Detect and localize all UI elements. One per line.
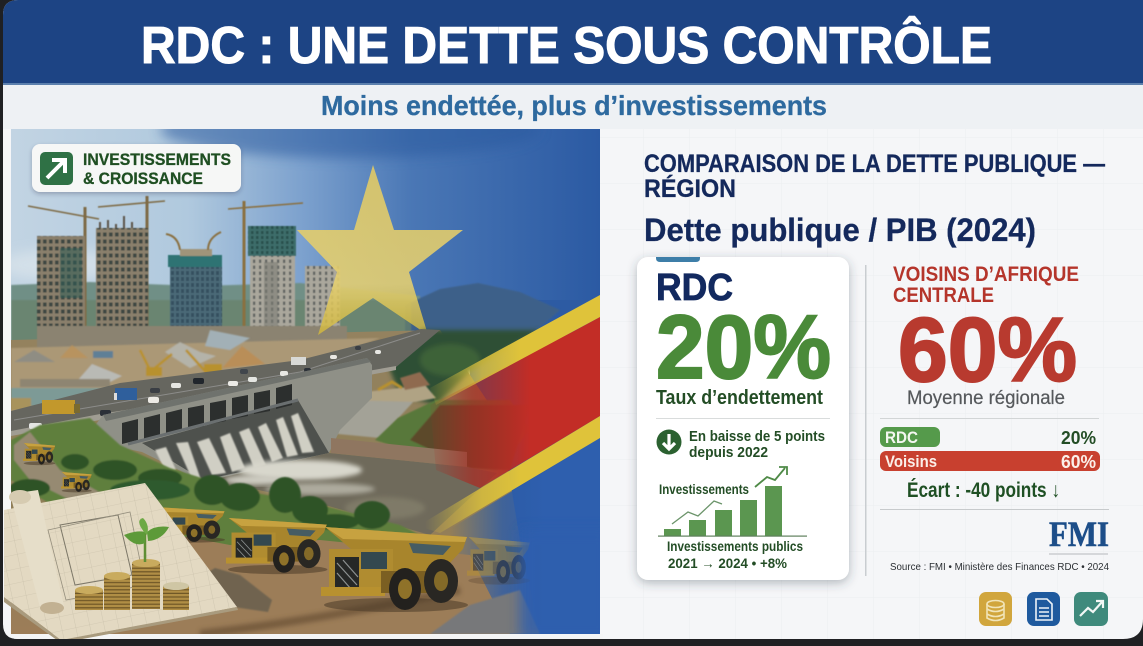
distant hills <box>11 281 560 340</box>
mining truck medium <box>226 518 327 574</box>
chart caption: 2021 → 2024 • +8% <box>668 556 787 571</box>
comparison bar: RDC: 20% <box>1061 428 1096 448</box>
icon: down arrow <box>656 430 682 454</box>
photo illustration: infrastructure and flag <box>0 102 610 640</box>
investment badge <box>32 144 241 192</box>
comparison bar: Voisins: 60% <box>1061 452 1096 472</box>
flag: lower yellow stripe <box>418 416 600 533</box>
subtitle: Moins endettée, plus d’investissements <box>321 90 827 121</box>
faded mining truck <box>467 537 530 585</box>
crane 2 <box>98 196 165 345</box>
chart subtitle: Dette publique / PIB (2024) <box>644 212 1036 248</box>
blue truck <box>114 388 137 400</box>
blueprint with coins and seedling <box>4 483 238 643</box>
water chutes <box>155 413 314 480</box>
tower 1 upper green net <box>60 248 82 298</box>
badge text: INVESTISSEMENTS <box>83 150 231 169</box>
flag: lower blue field <box>440 438 600 640</box>
work site with gravel piles <box>11 330 380 412</box>
blueprint sheet <box>4 483 238 643</box>
decline note: depuis 2022 <box>689 444 768 461</box>
mining truck large <box>321 527 468 612</box>
tower 5 <box>304 266 340 326</box>
neighbours heading: CENTRALE <box>893 284 994 307</box>
comparison bar: Voisins <box>880 451 1100 472</box>
neighbours heading: VOISINS D’AFRIQUE <box>893 263 1079 286</box>
construction towers <box>28 196 347 348</box>
rocks <box>172 545 540 634</box>
badge text <box>83 150 231 188</box>
gates <box>122 384 292 444</box>
icon: growth arrow <box>40 152 73 185</box>
gap: Écart : -40 points ↓ <box>907 479 1060 502</box>
bar chart: investments <box>658 467 807 537</box>
60 percent: 60% <box>898 300 1077 401</box>
crane 3 <box>228 201 303 345</box>
icon: document <box>1027 592 1060 626</box>
comparison bar: Voisins: Voisins <box>885 453 937 471</box>
dirt foreground <box>150 530 510 634</box>
tower 2 <box>95 227 148 326</box>
FMI logo: FMI <box>1049 514 1109 554</box>
left bank and trees <box>10 418 430 560</box>
yellow truck <box>42 400 80 414</box>
tower 4 <box>247 225 296 326</box>
decline note: En baisse de 5 points <box>689 428 825 445</box>
RDC label: RDC <box>656 267 733 309</box>
dark spillway base <box>142 400 329 480</box>
comparison heading: RÉGION <box>644 174 736 203</box>
dam <box>84 358 372 482</box>
icon: trend chart <box>1074 592 1108 626</box>
decline note <box>689 428 825 461</box>
tower 3 <box>165 230 223 326</box>
seedling <box>124 518 169 562</box>
excavators <box>138 348 205 372</box>
panel: RDC card <box>637 257 849 580</box>
badge text: & CROISSANCE <box>83 169 203 188</box>
retaining wall and far bank <box>338 372 436 438</box>
source: Source : FMI • Ministère des Finances RDC • 2024 <box>890 561 1109 573</box>
highway <box>11 329 440 436</box>
debt rate label: Taux d’endettement <box>656 387 823 409</box>
coin stacks <box>75 559 189 610</box>
20 percent: 20% <box>656 298 831 398</box>
comparison bar: RDC: RDC <box>885 429 918 447</box>
green hillside <box>375 400 530 470</box>
comparison heading <box>644 150 1105 203</box>
chart caption: Investissements publics <box>667 539 803 554</box>
flag: upper yellow stripe <box>430 295 600 405</box>
small far trucks <box>23 443 92 492</box>
river <box>222 453 482 534</box>
brown canal wall <box>331 438 467 467</box>
white truck <box>291 357 306 365</box>
flag: red stripe <box>430 317 600 488</box>
regional average label: Moyenne régionale <box>907 388 1065 409</box>
neighbours heading <box>893 263 1079 307</box>
chart caption <box>667 539 803 571</box>
star of the flag <box>297 165 463 335</box>
rolled plan <box>9 490 64 614</box>
forest on the right bank <box>385 330 540 405</box>
walkway <box>128 400 298 444</box>
title banner <box>3 0 1143 85</box>
tab <box>656 257 700 262</box>
cars <box>29 346 381 429</box>
tower 2 crown <box>100 216 132 228</box>
pond <box>11 388 106 406</box>
sky <box>0 102 600 634</box>
comparison bar: RDC <box>880 427 1096 448</box>
podium buildings <box>37 326 347 348</box>
tower 1 <box>36 235 86 326</box>
dam body <box>84 358 372 482</box>
bar chart: investments: Investissements <box>659 482 749 497</box>
title: RDC : UNE DETTE SOUS CONTRÔLE <box>141 16 992 75</box>
mining truck small <box>153 507 225 543</box>
blue fade over right truck <box>520 530 610 640</box>
crane 1 <box>28 206 99 345</box>
panel: regional neighbours <box>880 263 1109 573</box>
ground <box>11 330 540 634</box>
icon: coins <box>979 592 1012 626</box>
